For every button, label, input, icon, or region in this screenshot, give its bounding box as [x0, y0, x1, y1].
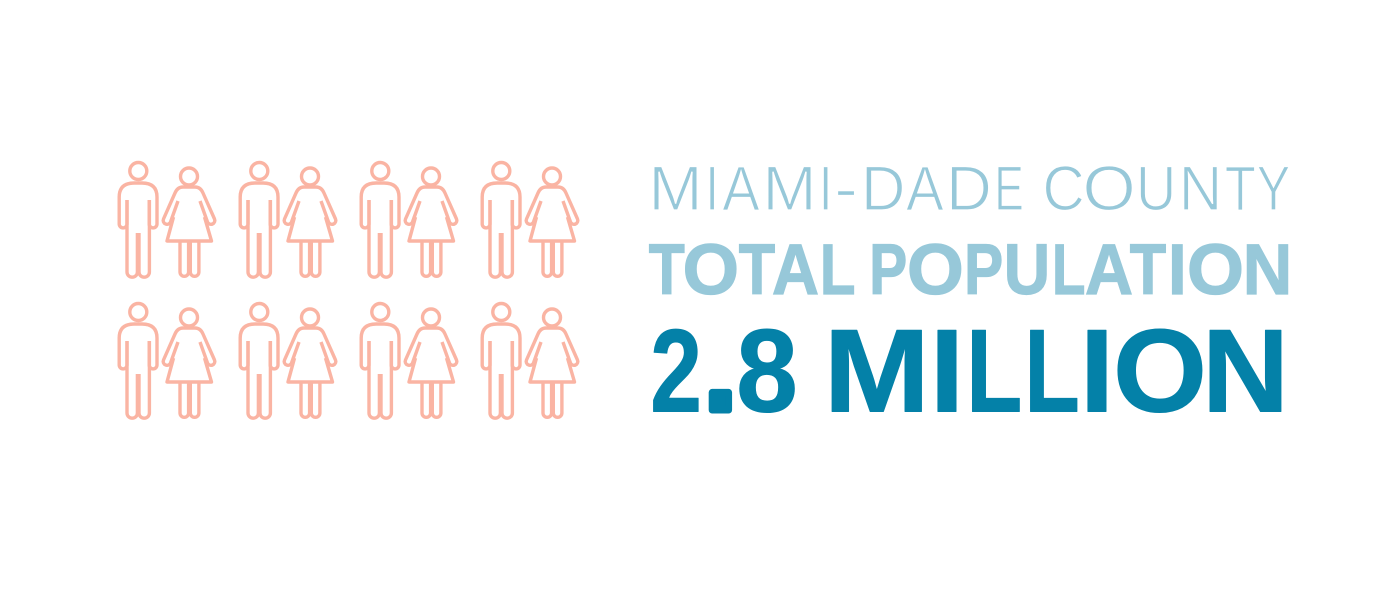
heading: Miami-Dade County: A	[722, 154, 760, 224]
icon: man and woman pair 4	[482, 162, 578, 277]
subheading: Total Population: T	[1130, 231, 1166, 310]
big number: 2.8 million: O	[1113, 306, 1207, 438]
heading: Miami-Dade County: M	[762, 154, 816, 224]
icon: man and woman pair 8	[482, 304, 578, 418]
big number: 2.8 million: .	[704, 304, 737, 436]
subheading: Total Population: U	[1004, 231, 1050, 310]
people icons: top row	[119, 162, 578, 277]
heading: Miami-Dade County: I	[819, 154, 833, 224]
icon: man and woman pair 7	[361, 304, 457, 418]
icon: man and woman pair 6	[240, 304, 336, 418]
heading: Miami-Dade County: -	[834, 154, 858, 224]
big number: 2.8 million: I	[1080, 306, 1114, 438]
heading: Miami-Dade County: M	[648, 154, 702, 224]
subheading: Total Population: N	[1243, 231, 1292, 310]
subheading: Total Population: T	[649, 231, 685, 310]
icon: man and woman pair 5	[119, 304, 215, 418]
heading: Miami-Dade County: Y	[1257, 154, 1290, 224]
big number: 2.8 million: L	[1024, 306, 1080, 438]
big number: 2.8 million: 8	[736, 306, 798, 438]
big number: 2.8 million: M	[824, 306, 930, 438]
subheading: Total Population: L	[820, 231, 854, 310]
heading: Miami-Dade County: D	[946, 154, 992, 224]
subheading: Total Population: L	[1052, 231, 1085, 310]
icon: man and woman pair 1	[119, 162, 215, 277]
heading: Miami-Dade County: D	[861, 154, 905, 224]
heading: Miami-Dade County: O	[1082, 154, 1136, 224]
subheading: Total Population: O	[907, 231, 964, 310]
heading: Miami-Dade County: E	[994, 154, 1024, 224]
subheading: Total Population: T	[739, 231, 775, 310]
big number: 2.8 million: N	[1202, 306, 1289, 438]
heading: Miami-Dade County: A	[906, 154, 944, 224]
heading: Miami-Dade County: U	[1136, 154, 1176, 224]
big number: 2.8 million: 2	[650, 306, 702, 438]
subheading: Total Population: A	[772, 231, 819, 310]
big number: 2.8 million: L	[966, 306, 1022, 438]
subheading: Total Population: O	[683, 231, 739, 310]
icon: man and woman pair 3	[361, 162, 457, 277]
subheading: Total Population: P	[964, 231, 1003, 310]
people icons: bottom row	[119, 304, 578, 418]
heading: Miami-Dade County: I	[705, 154, 719, 224]
heading: Miami-Dade County: C	[1042, 154, 1085, 224]
heading: Miami-Dade County: N	[1179, 154, 1222, 224]
subheading: Total Population: A	[1085, 231, 1133, 310]
big number: 2.8 million: I	[930, 306, 964, 438]
subheading: Total Population: P	[869, 231, 907, 310]
icon: man and woman pair 2	[240, 162, 336, 277]
subheading: Total Population: O	[1187, 231, 1244, 310]
subheading: Total Population: I	[1168, 231, 1187, 310]
heading: Miami-Dade County: T	[1225, 154, 1256, 224]
